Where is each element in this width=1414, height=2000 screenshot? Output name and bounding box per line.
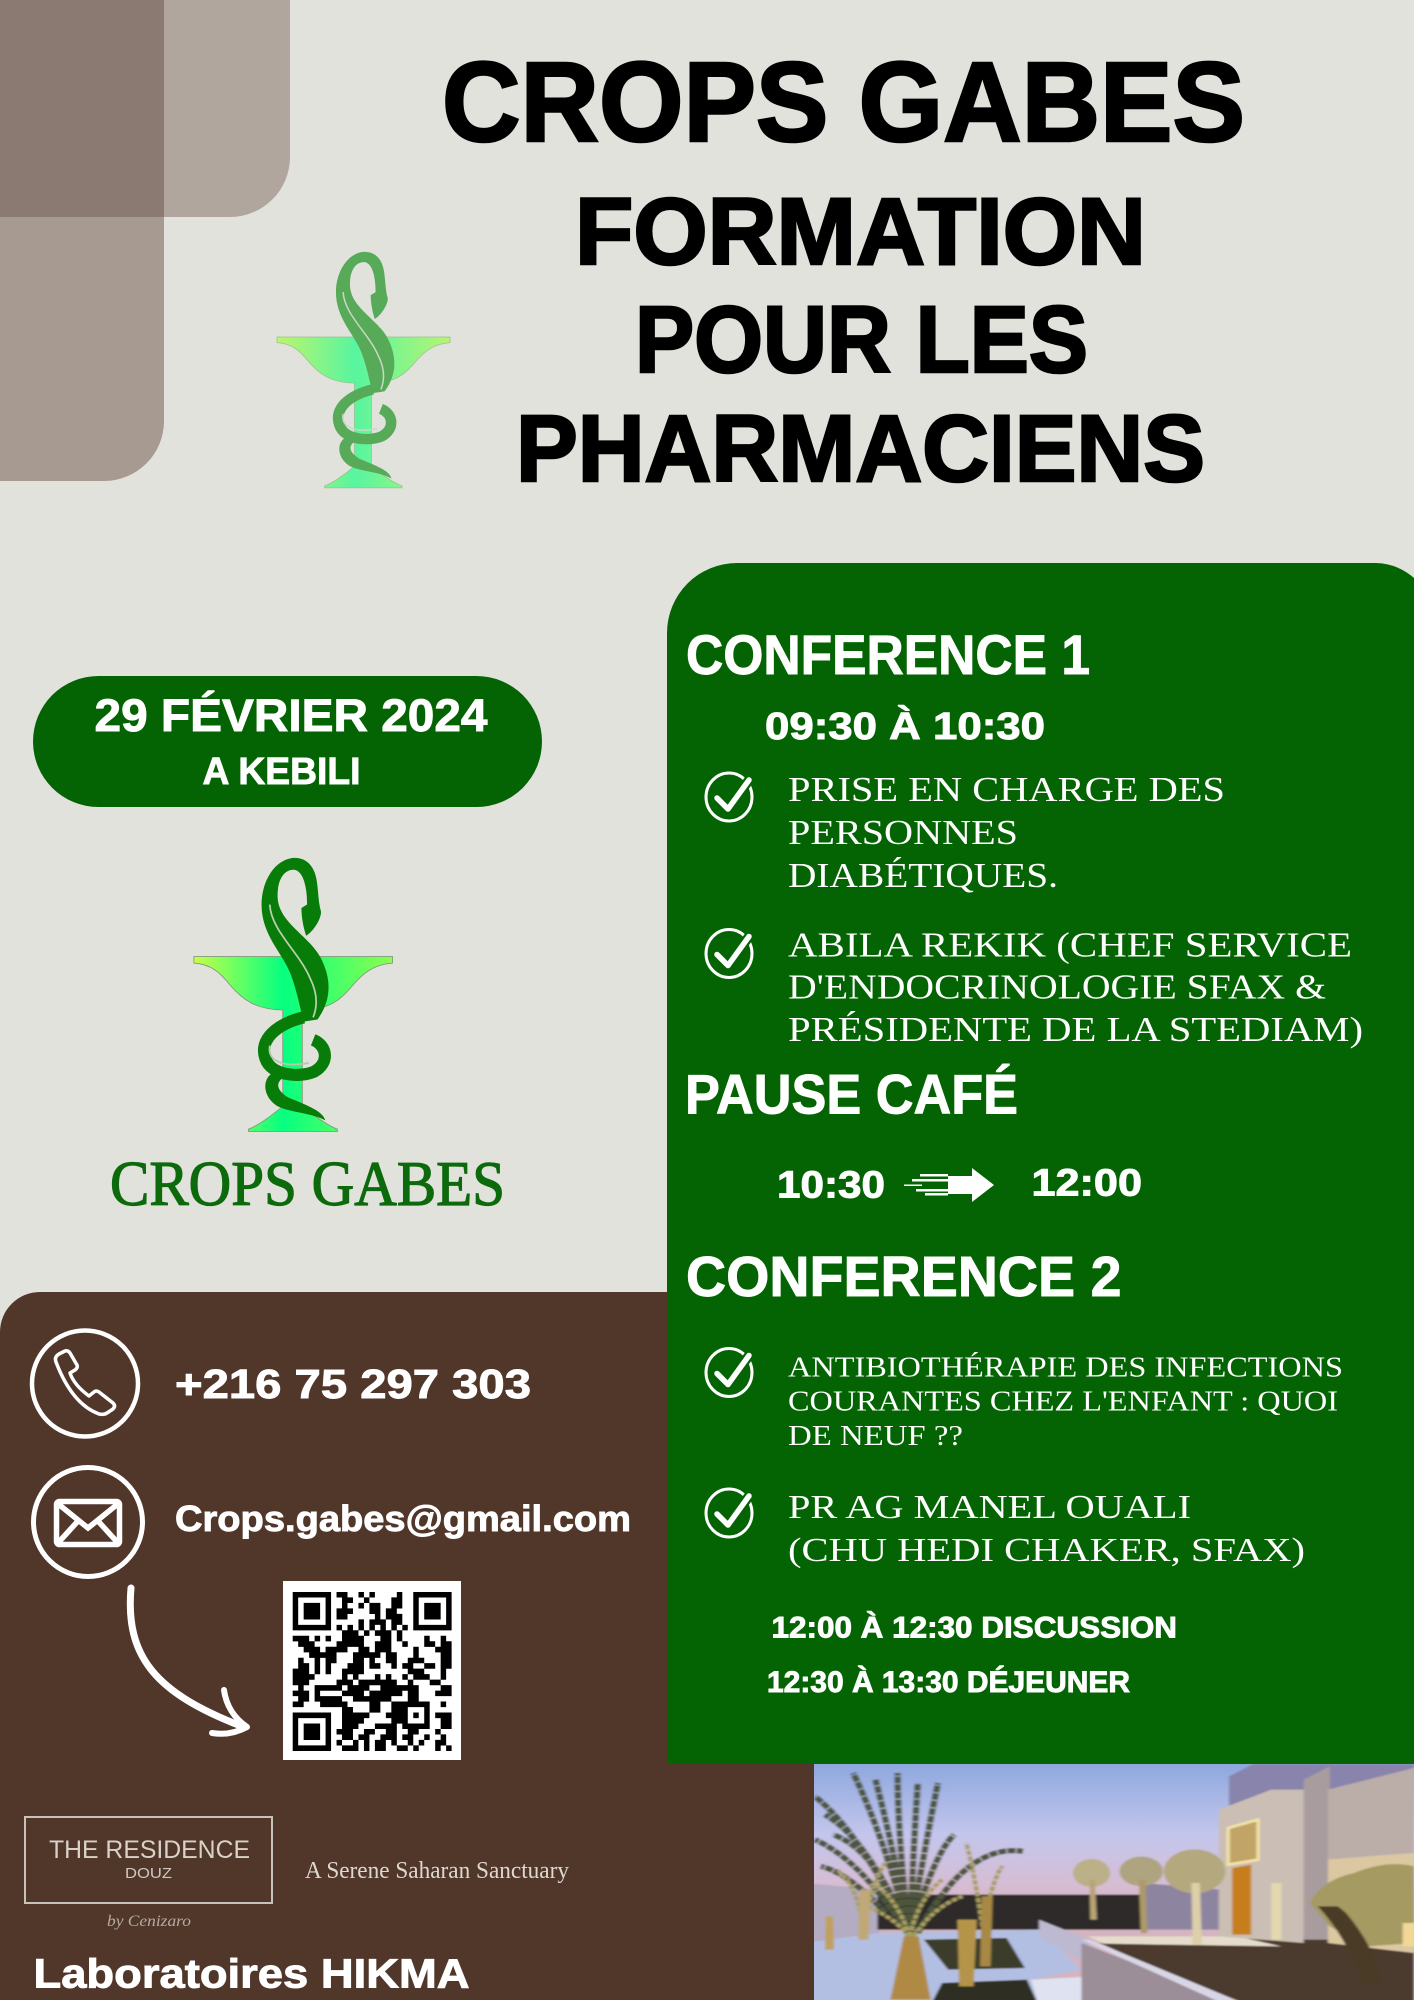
topic: conference 1: PERSONNES	[788, 813, 1018, 852]
heading: conference 1: CONFERENCE 1	[686, 623, 1090, 686]
phone number: +216 75 297 303	[175, 1361, 531, 1407]
arrow: pause	[904, 1168, 994, 1202]
heading: crops gabes: CROPS GABES	[442, 39, 1245, 165]
hotel location: DOUZ	[125, 1865, 172, 1882]
olive tree	[1310, 1864, 1414, 1946]
heading: pause cafe: PAUSE CAFÉ	[685, 1062, 1018, 1126]
hotel brand: by Cenizaro	[107, 1913, 191, 1930]
heading: conference 2: CONFERENCE 2	[686, 1245, 1122, 1309]
icon: top pharmacy logo	[277, 252, 450, 488]
arrow to qr code	[130, 1588, 247, 1734]
speaker: conference 2: PR AG MANEL OUALI	[788, 1489, 1191, 1526]
email address: Crops.gabes@gmail.com	[175, 1498, 631, 1539]
topic: conference 1	[788, 770, 1225, 895]
icon: check 4	[706, 1489, 752, 1537]
heading: pour les: POUR LES	[635, 287, 1088, 393]
time: conference 1: 09:30 À 10:30	[765, 704, 1045, 748]
logo: the residence douz	[25, 1817, 272, 1930]
logo wordmark: CROPS GABES	[110, 1149, 505, 1219]
topic: conference 2	[788, 1351, 1343, 1452]
heading: formation: FORMATION	[575, 179, 1146, 285]
mid palms	[1073, 1849, 1225, 1945]
speaker: conference 2: (CHU HEDI CHAKER, SFAX)	[788, 1532, 1305, 1569]
speaker: conference 1: ABILA REKIK (CHEF SERVICE	[788, 926, 1352, 964]
decorative corner blocks	[0, 0, 290, 481]
date: 29 FÉVRIER 2024	[94, 690, 488, 741]
time: pause start: 10:30	[777, 1164, 885, 1206]
palm trunks	[890, 1936, 931, 2000]
speaker: conference 1: D'ENDOCRINOLOGIE SFAX &	[788, 968, 1326, 1006]
icon: email	[34, 1468, 142, 1576]
hotel name: THE RESIDENCE	[49, 1836, 250, 1864]
speaker: conference 2	[788, 1489, 1305, 1569]
speaker: conference 1	[788, 926, 1363, 1049]
topic: conference 2: COURANTES CHEZ L'ENFANT : QUOI	[788, 1385, 1338, 1417]
schedule: discussion: 12:00 À 12:30 DISCUSSION	[772, 1610, 1177, 1644]
qr code	[283, 1581, 461, 1760]
speaker: conference 1: PRÉSIDENTE DE LA STEDIAM)	[788, 1010, 1363, 1049]
topic: conference 1: DIABÉTIQUES.	[788, 856, 1058, 895]
topic: conference 2: DE NEUF ??	[788, 1420, 963, 1452]
palm fronds	[815, 1773, 1023, 1936]
icon: check 3	[706, 1348, 752, 1396]
logo: crops gabes	[110, 858, 505, 1219]
title	[442, 39, 1245, 502]
date pill	[33, 676, 542, 807]
sponsor: Laboratoires HIKMA	[34, 1950, 470, 1996]
schedule: lunch: 12:30 À 13:30 DÉJEUNER	[767, 1665, 1130, 1699]
heading: pharmaciens: PHARMACIENS	[516, 396, 1205, 502]
icon: phone	[32, 1330, 138, 1436]
topic: conference 1: PRISE EN CHARGE DES	[788, 770, 1225, 809]
icon: check 2	[706, 930, 752, 978]
topic: conference 2: ANTIBIOTHÉRAPIE DES INFECTIONS	[788, 1351, 1343, 1384]
photo: hotel at dusk	[814, 1764, 1414, 2000]
icon: check 1	[706, 773, 752, 821]
time: pause end: 12:00	[1032, 1162, 1142, 1204]
hotel tagline: A Serene Saharan Sanctuary	[305, 1858, 569, 1884]
location: A KEBILI	[202, 751, 360, 793]
icon: pharmacy cup and serpent	[194, 858, 392, 1131]
panel: programme	[667, 563, 1414, 1764]
panel: contact footer	[0, 1292, 820, 2000]
